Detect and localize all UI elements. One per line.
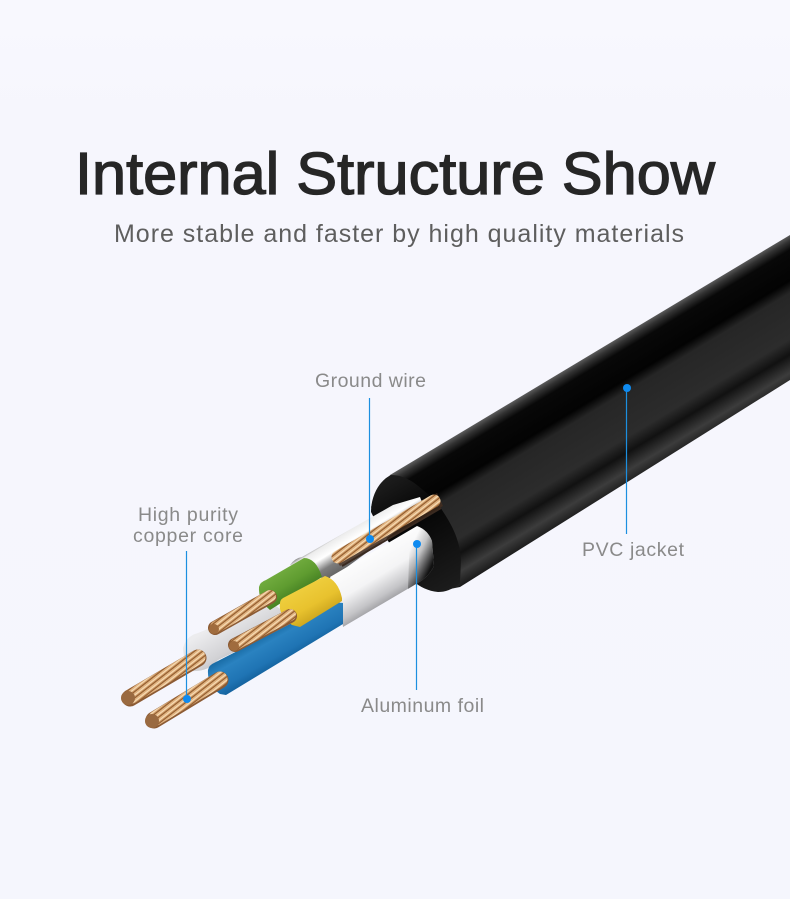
callout: PVC jacket: PVC jacket [582,539,685,561]
jacket inner face [371,475,461,592]
cable illustration [121,235,790,728]
copper conductor green core [209,596,270,634]
ground wire [333,493,443,566]
title: Internal Structure Show [75,141,715,207]
aluminum foil white part [330,526,434,627]
PVC jacket [371,235,790,591]
yellow insulated core [280,576,342,627]
aluminum foil shadow near jacket [408,526,434,589]
white insulated core [183,603,298,671]
blue insulated core [208,602,343,695]
callout: high purity copper core: copper core [133,525,243,547]
callout: PVC jacket [582,384,685,561]
copper conductor blue core [145,679,220,728]
aluminum foil upper silver part [290,497,425,578]
green insulated core [259,558,322,610]
callout: high purity copper core [133,504,243,703]
callout: ground wire: Ground wire [315,370,426,392]
copper conductor white core [121,657,198,705]
callout: aluminum foil: Aluminum foil [361,695,484,717]
subtitle: More stable and faster by high quality materials [114,220,684,248]
callout: aluminum foil [361,540,484,717]
callout: high purity copper core: High purity [138,504,238,526]
copper conductor yellow core [229,615,290,651]
callout: ground wire [315,370,426,543]
